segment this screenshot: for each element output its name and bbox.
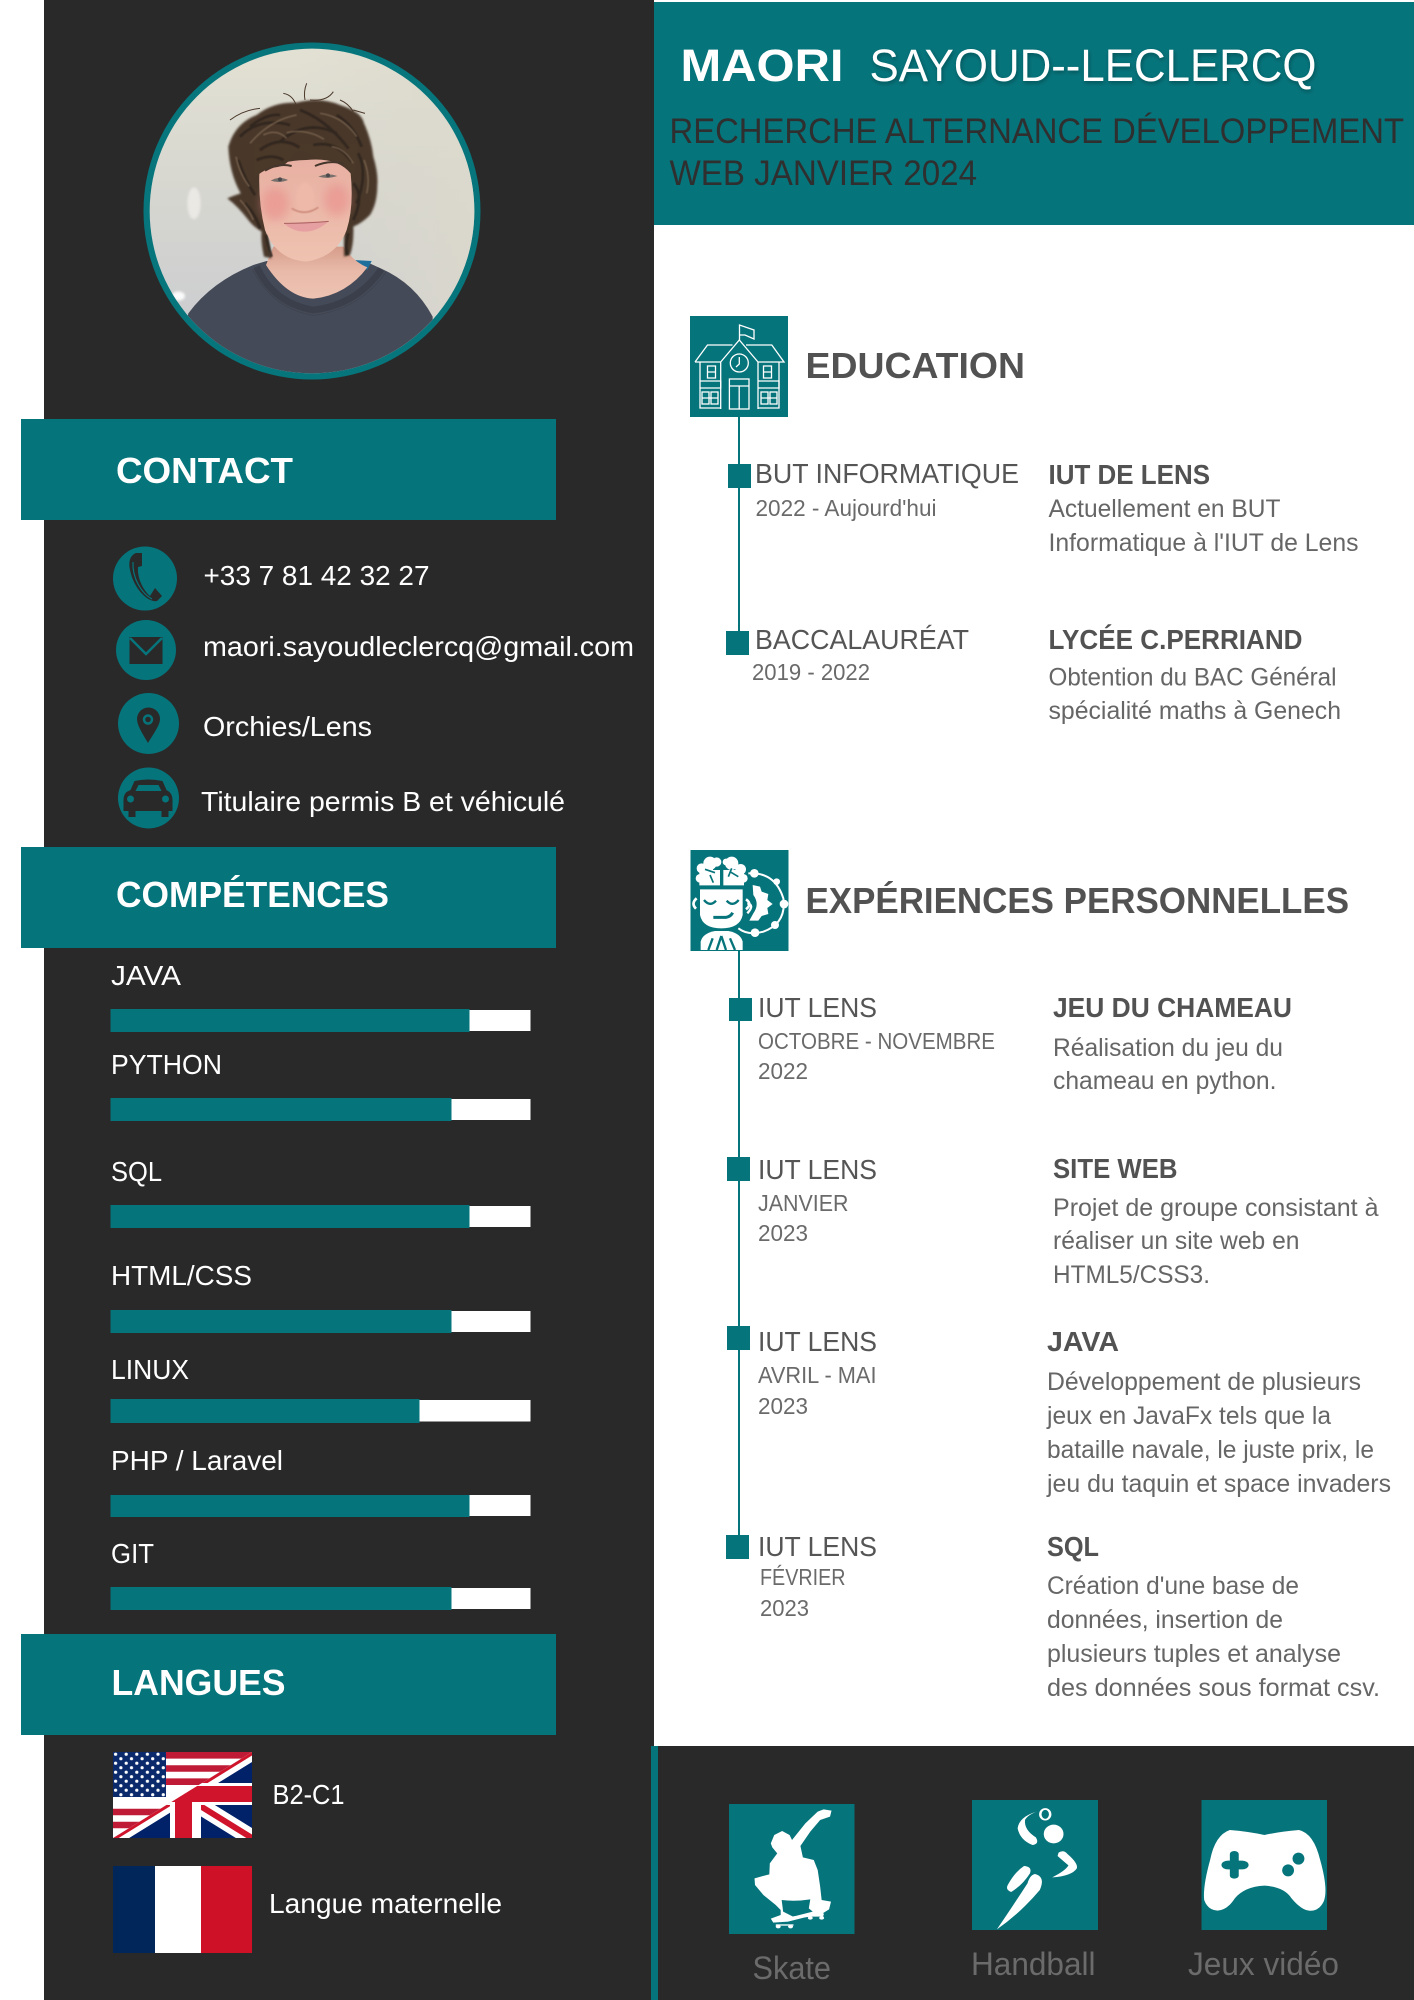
experience item: site web: 2023 [758, 1220, 808, 1246]
education item: baccalaureat: 2019 - 2022 [752, 659, 870, 685]
experience item: site web [727, 1153, 1379, 1289]
hobby: handball [971, 1800, 1098, 1982]
skill: sql [110, 1156, 530, 1228]
panel: personal experience [690, 850, 1391, 1702]
label: skate: Skate [752, 1950, 831, 1986]
timeline marker [726, 631, 749, 655]
name: MAORI [680, 40, 844, 91]
experience item: jeu du chameau: JEU DU CHAMEAU [1053, 992, 1292, 1023]
hobby: video games [1188, 1800, 1339, 1982]
experience item: sql: 2023 [760, 1595, 809, 1621]
experience item: java: IUT LENS [758, 1326, 877, 1357]
experience item: sql: des données sous format csv. [1047, 1674, 1380, 1702]
education item: BUT: BUT INFORMATIQUE [755, 458, 1019, 489]
skill: html/css [110, 1260, 530, 1333]
panel: left sidebar [21, 0, 654, 2000]
education item: baccalaureat: LYCÉE C.PERRIAND [1048, 624, 1302, 655]
contact row: driving licence [118, 768, 565, 828]
experience item: site web: Projet de groupe consistant à [1053, 1194, 1379, 1222]
name [680, 40, 1316, 91]
experience item: jeu du chameau: Réalisation du jeu du [1053, 1034, 1283, 1062]
icon: school building [690, 316, 788, 417]
skill: java [110, 960, 530, 1032]
panel: hobbies footer [651, 1746, 1414, 2000]
experience item: sql: Création d'une base de [1047, 1572, 1299, 1600]
skill: linux [110, 1354, 530, 1423]
education item: BUT: IUT DE LENS [1048, 459, 1210, 490]
heading band: languages [21, 1634, 556, 1735]
experience item: jeu du chameau: IUT LENS [758, 992, 877, 1023]
job search line [670, 112, 1404, 193]
experience item: sql: IUT LENS [758, 1531, 877, 1562]
icon: skater [755, 1809, 832, 1928]
icon: game controller [1204, 1830, 1325, 1911]
education item: baccalaureat [726, 624, 1341, 725]
skill: java: JAVA [111, 960, 181, 991]
timeline marker [727, 1326, 750, 1350]
phone number: +33 7 81 42 32 27 [204, 560, 430, 591]
experience item: sql: SQL [1047, 1531, 1099, 1562]
experience item: jeu du chameau: chameau en python. [1053, 1067, 1276, 1095]
timeline marker [726, 1535, 749, 1559]
icon: brain and gears head [690, 850, 788, 951]
skill: python: PYTHON [111, 1049, 222, 1080]
heading band: contact [21, 419, 556, 520]
hobby: skate [729, 1804, 854, 1986]
education item: baccalaureat: Obtention du BAC Général [1048, 664, 1336, 692]
timeline marker [729, 998, 752, 1021]
experience item: java: 2023 [758, 1393, 808, 1419]
contact row: location [118, 693, 372, 754]
skill: html/css: HTML/CSS [111, 1260, 252, 1291]
profile photo [140, 42, 487, 393]
licence text: Titulaire permis B et véhiculé [201, 786, 565, 817]
language level: B2-C1 [272, 1779, 344, 1810]
timeline line: education [738, 417, 740, 633]
experience item: java: JAVA [1047, 1326, 1119, 1357]
contact row: email [116, 620, 634, 680]
education item: BUT: 2022 - Aujourd'hui [756, 495, 936, 521]
experience item: jeu du chameau: OCTOBRE - NOVEMBRE [758, 1028, 995, 1054]
contact row: phone [113, 546, 430, 610]
heading: languages: LANGUES [112, 1662, 286, 1703]
skill: sql: SQL [111, 1156, 162, 1187]
experience item: site web: réaliser un site web en [1053, 1227, 1300, 1255]
icon: car [118, 768, 179, 828]
experience item: java: Développement de plusieurs [1047, 1368, 1361, 1396]
skill: linux: LINUX [111, 1354, 189, 1385]
skill: python [110, 1049, 530, 1121]
icon: US and UK flag [113, 1752, 252, 1838]
skill: php / laravel [110, 1445, 530, 1517]
language level: Langue maternelle [269, 1888, 502, 1919]
header banner [654, 2, 1414, 225]
skill: php / laravel: PHP / Laravel [111, 1445, 283, 1476]
experience item: sql [726, 1531, 1380, 1702]
experience item: java [727, 1326, 1391, 1498]
education item: baccalaureat: BACCALAURÉAT [755, 624, 969, 655]
heading: skills: COMPÉTENCES [116, 874, 389, 915]
education item: BUT: Informatique à l'IUT de Lens [1048, 529, 1358, 557]
skill: git [110, 1538, 530, 1610]
experience item: sql: plusieurs tuples et analyse [1047, 1640, 1341, 1668]
chart: skill bars [110, 960, 530, 1610]
language: english [113, 1752, 344, 1838]
experience item: jeu du chameau: 2022 [758, 1058, 808, 1084]
timeline line: experience [738, 950, 740, 1536]
heading: education: EDUCATION [806, 345, 1025, 386]
heading: personal experience: EXPÉRIENCES PERSONNELLES [806, 880, 1349, 921]
education item: BUT: Actuellement en BUT [1048, 495, 1280, 523]
location text: Orchies/Lens [203, 711, 372, 742]
label: handball: Handball [971, 1946, 1096, 1982]
language: french [113, 1866, 502, 1953]
experience item: sql: données, insertion de [1047, 1606, 1283, 1634]
experience item: jeu du chameau [729, 992, 1292, 1095]
icon: handball player [997, 1809, 1077, 1929]
education item: BUT [728, 458, 1358, 557]
experience item: java: jeux en JavaFx tels que la [1046, 1402, 1331, 1430]
heading band: skills [21, 847, 556, 948]
experience item: java: bataille navale, le juste prix, le [1047, 1436, 1374, 1464]
experience item: java: jeu du taquin et space invaders [1046, 1470, 1391, 1498]
experience item: site web: JANVIER [758, 1190, 848, 1216]
icon: map pin [118, 693, 179, 754]
icon: French flag [113, 1866, 252, 1953]
experience item: java: AVRIL - MAI [758, 1362, 876, 1388]
experience item: site web: SITE WEB [1053, 1153, 1178, 1184]
experience item: site web: HTML5/CSS3. [1053, 1261, 1210, 1289]
education item: baccalaureat: spécialité maths à Genech [1048, 697, 1341, 725]
timeline marker [728, 464, 751, 488]
icon: phone [113, 546, 177, 610]
heading: contact: CONTACT [116, 450, 293, 491]
label: video games: Jeux vidéo [1188, 1946, 1339, 1982]
experience item: site web: IUT LENS [758, 1154, 877, 1185]
icon: envelope [116, 620, 176, 680]
skill: git: GIT [111, 1538, 154, 1569]
email address: maori.sayoudleclercq@gmail.com [203, 631, 634, 662]
name: SAYOUD--LECLERCQ [870, 40, 1316, 91]
panel: education [690, 316, 1358, 725]
timeline marker [727, 1157, 750, 1181]
job search line: WEB JANVIER 2024 [670, 154, 977, 193]
experience item: sql: FÉVRIER [760, 1564, 846, 1590]
